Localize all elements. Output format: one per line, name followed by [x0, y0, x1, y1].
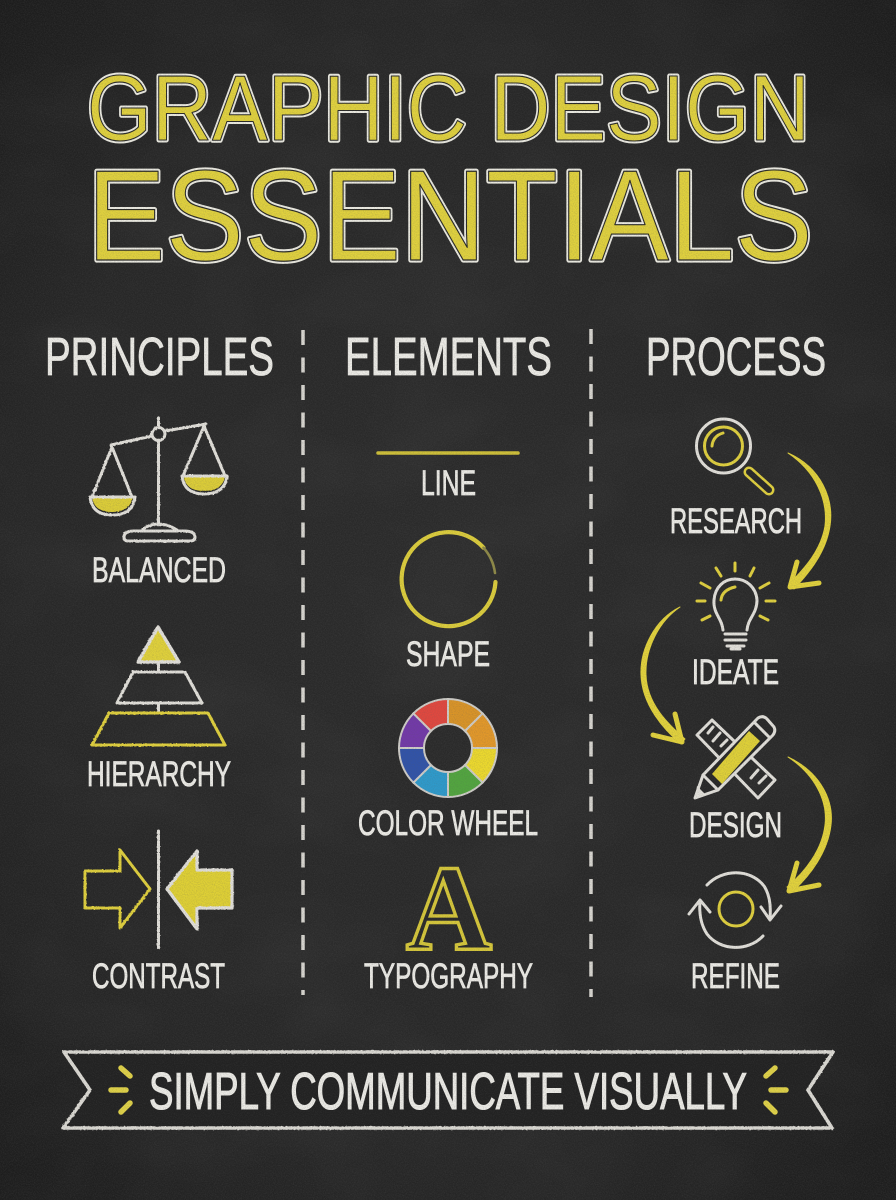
heading: elements: ELEMENTS [345, 327, 552, 387]
icon: ruler and pencil [695, 717, 775, 798]
column divider right [589, 329, 593, 997]
panel: elements [345, 327, 552, 996]
title line: graphic design: GRAPHIC DESIGN [87, 56, 810, 160]
icon: color wheel [399, 699, 497, 797]
icon: balance scale [90, 418, 227, 541]
title line: essentials: ESSENTIALS [87, 144, 813, 288]
icon: circle shape [402, 532, 496, 626]
label: typography: TYPOGRAPHY [364, 957, 533, 996]
label: hierarchy: HIERARCHY [87, 755, 231, 794]
banner [63, 1052, 833, 1128]
label: balanced: BALANCED [92, 551, 226, 590]
banner ribbon [63, 1052, 833, 1128]
title [87, 56, 813, 288]
panel: principles [45, 327, 274, 996]
title line: essentials: ESSENTIALS [87, 144, 813, 288]
heading: principles: PRINCIPLES [45, 327, 274, 387]
label: contrast: CONTRAST [92, 957, 225, 996]
label: research: RESEARCH [670, 502, 802, 541]
title line: essentials: ESSENTIALS [87, 144, 813, 288]
arrow: design to refine [787, 757, 831, 892]
icon: light bulb [697, 563, 775, 649]
icon: magnifying glass [696, 419, 769, 490]
icon: contrast arrows [85, 831, 232, 948]
label: design: DESIGN [689, 806, 782, 845]
label: ideate: IDEATE [692, 653, 779, 692]
icon: line [378, 451, 518, 455]
label: line: LINE [421, 464, 476, 503]
arrow: research to ideate [788, 453, 831, 589]
icon: typography letter A: A [406, 841, 492, 976]
label: refine: REFINE [691, 957, 780, 996]
panel: process [641, 327, 831, 996]
title line: graphic design: GRAPHIC DESIGN [87, 56, 810, 160]
label: shape: SHAPE [406, 635, 490, 674]
label: color wheel: COLOR WHEEL [358, 804, 538, 843]
icon: refine cycle [689, 873, 781, 947]
icon: right sparks [766, 1068, 786, 1112]
icon: hierarchy pyramid [92, 627, 225, 745]
column divider left [301, 330, 305, 995]
icon: left sparks [111, 1068, 130, 1112]
title line: graphic design: GRAPHIC DESIGN [87, 56, 810, 160]
arrow: ideate to design [641, 607, 685, 744]
